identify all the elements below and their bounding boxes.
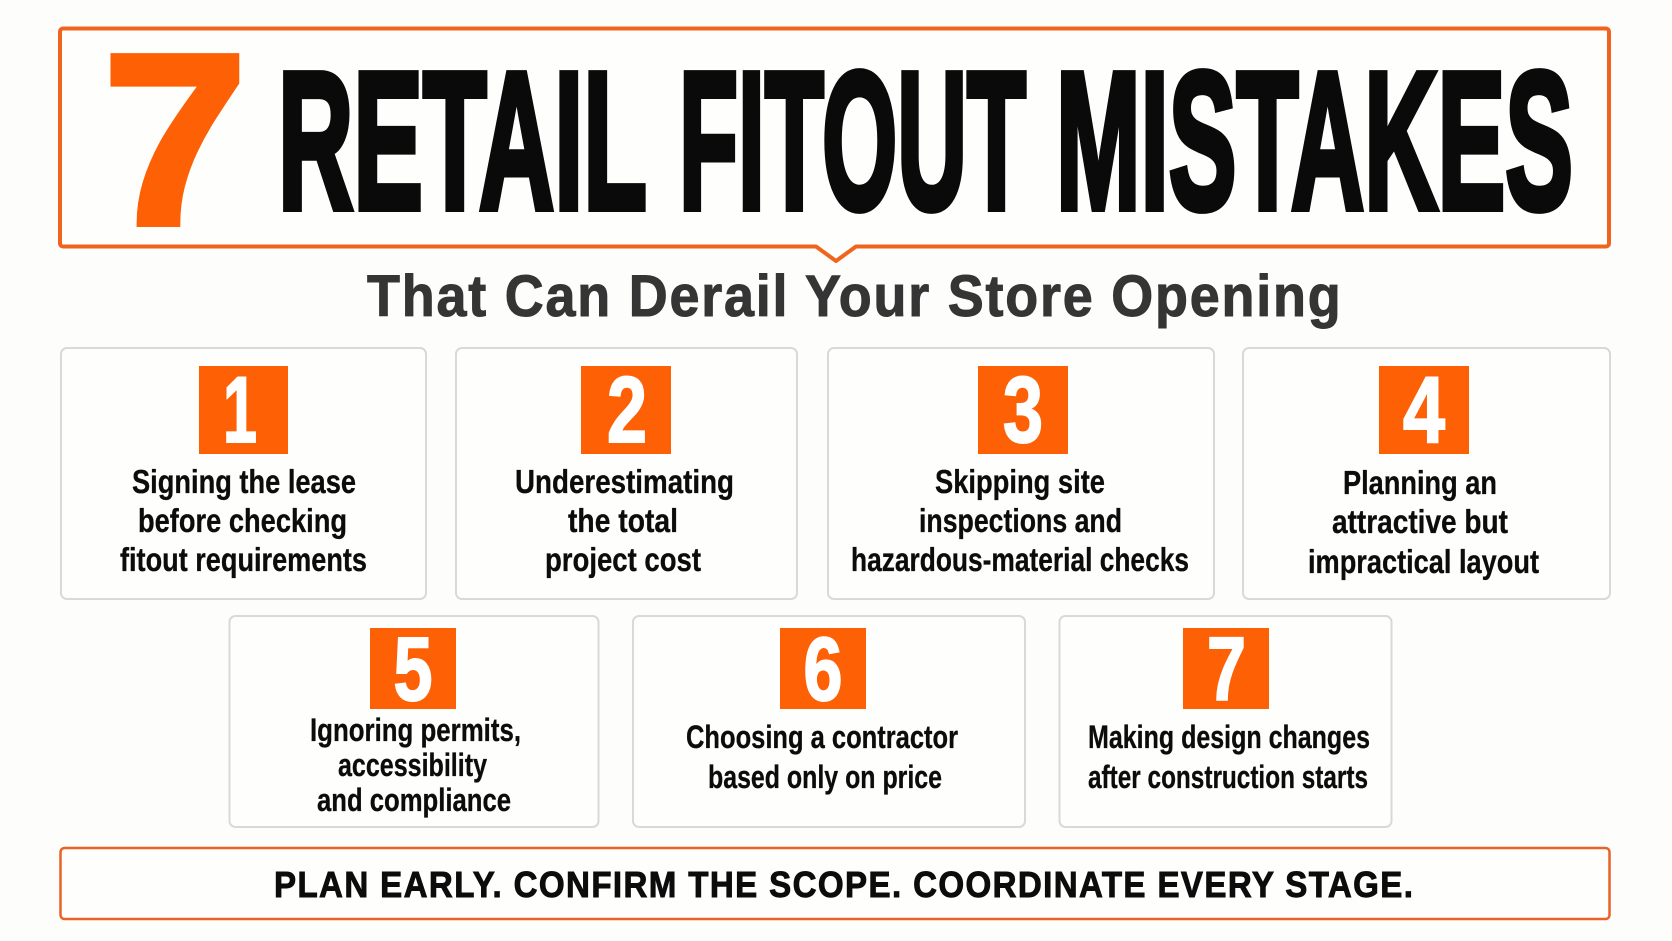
panel: mistake 1: [61, 348, 426, 599]
number badge 7: 7: [1207, 620, 1246, 720]
panel: mistake 7: [1060, 616, 1392, 827]
mistake 5 text: [310, 712, 521, 818]
mistake 4 text: impractical layout: [1308, 543, 1539, 580]
number badge 3: [978, 357, 1068, 462]
number badge 6: 6: [804, 620, 842, 720]
title banner: [60, 3, 1609, 276]
number badge 5: 5: [394, 620, 432, 720]
panel: mistake 3: [828, 348, 1214, 599]
mistake 1 text: Signing the lease: [132, 463, 356, 500]
mistake 5 text: accessibility: [338, 747, 487, 783]
panel: mistake 5: [230, 616, 598, 827]
heading text: [278, 32, 1573, 250]
mistake 3 text: hazardous-material checks: [851, 541, 1189, 578]
number badge 2: 2: [607, 357, 647, 462]
number badge 6: [780, 620, 866, 720]
big orange seven: 7: [102, 3, 248, 276]
mistake 7 text: Making design changes: [1088, 719, 1370, 755]
number badge 4: [1379, 357, 1469, 462]
mistake 4 text: [1308, 464, 1539, 580]
number badge 5: [370, 620, 456, 720]
mistake 2 text: [515, 463, 734, 578]
mistake 5 text: and compliance: [317, 782, 511, 818]
mistake 7 text: after construction starts: [1088, 759, 1368, 795]
number badge 3: 3: [1003, 357, 1043, 462]
number badge 2: [581, 357, 671, 462]
subtitle: That Can Derail Your Store Opening: [367, 263, 1341, 328]
mistake 2 text: project cost: [545, 541, 701, 578]
mistake 6 text: [686, 719, 958, 795]
mistake 7 text: [1088, 719, 1370, 795]
mistake 6 text: Choosing a contractor: [686, 719, 958, 755]
mistake 3 text: [851, 463, 1189, 578]
mistake 1 text: before checking: [138, 502, 347, 539]
mistake 6 text: based only on price: [708, 759, 942, 795]
number badge 7: [1183, 620, 1269, 720]
mistake 1 text: fitout requirements: [120, 541, 367, 578]
number badge 1: [199, 357, 288, 462]
mistake 2 text: the total: [568, 502, 678, 539]
mistake 2 text: Underestimating: [515, 463, 734, 500]
heading text: FITOUT: [679, 32, 1026, 250]
panel: mistake 6: [633, 616, 1025, 827]
panel: mistake 2: [456, 348, 797, 599]
number badge 1: 1: [223, 357, 257, 462]
bottom call-to-action banner: [60, 848, 1610, 919]
heading text: RETAIL: [278, 32, 647, 250]
mistake 1 text: [120, 463, 367, 578]
number badge 4: 4: [1403, 357, 1445, 462]
call-to-action text: PLAN EARLY. CONFIRM THE SCOPE. COORDINATE EVERY STAGE.: [274, 866, 1413, 905]
mistake 3 text: Skipping site: [935, 463, 1105, 500]
mistake 4 text: Planning an: [1343, 464, 1497, 501]
mistake 4 text: attractive but: [1332, 503, 1508, 540]
panel: mistake 4: [1243, 348, 1610, 599]
mistake 3 text: inspections and: [919, 502, 1122, 539]
mistake 5 text: Ignoring permits,: [310, 712, 521, 748]
